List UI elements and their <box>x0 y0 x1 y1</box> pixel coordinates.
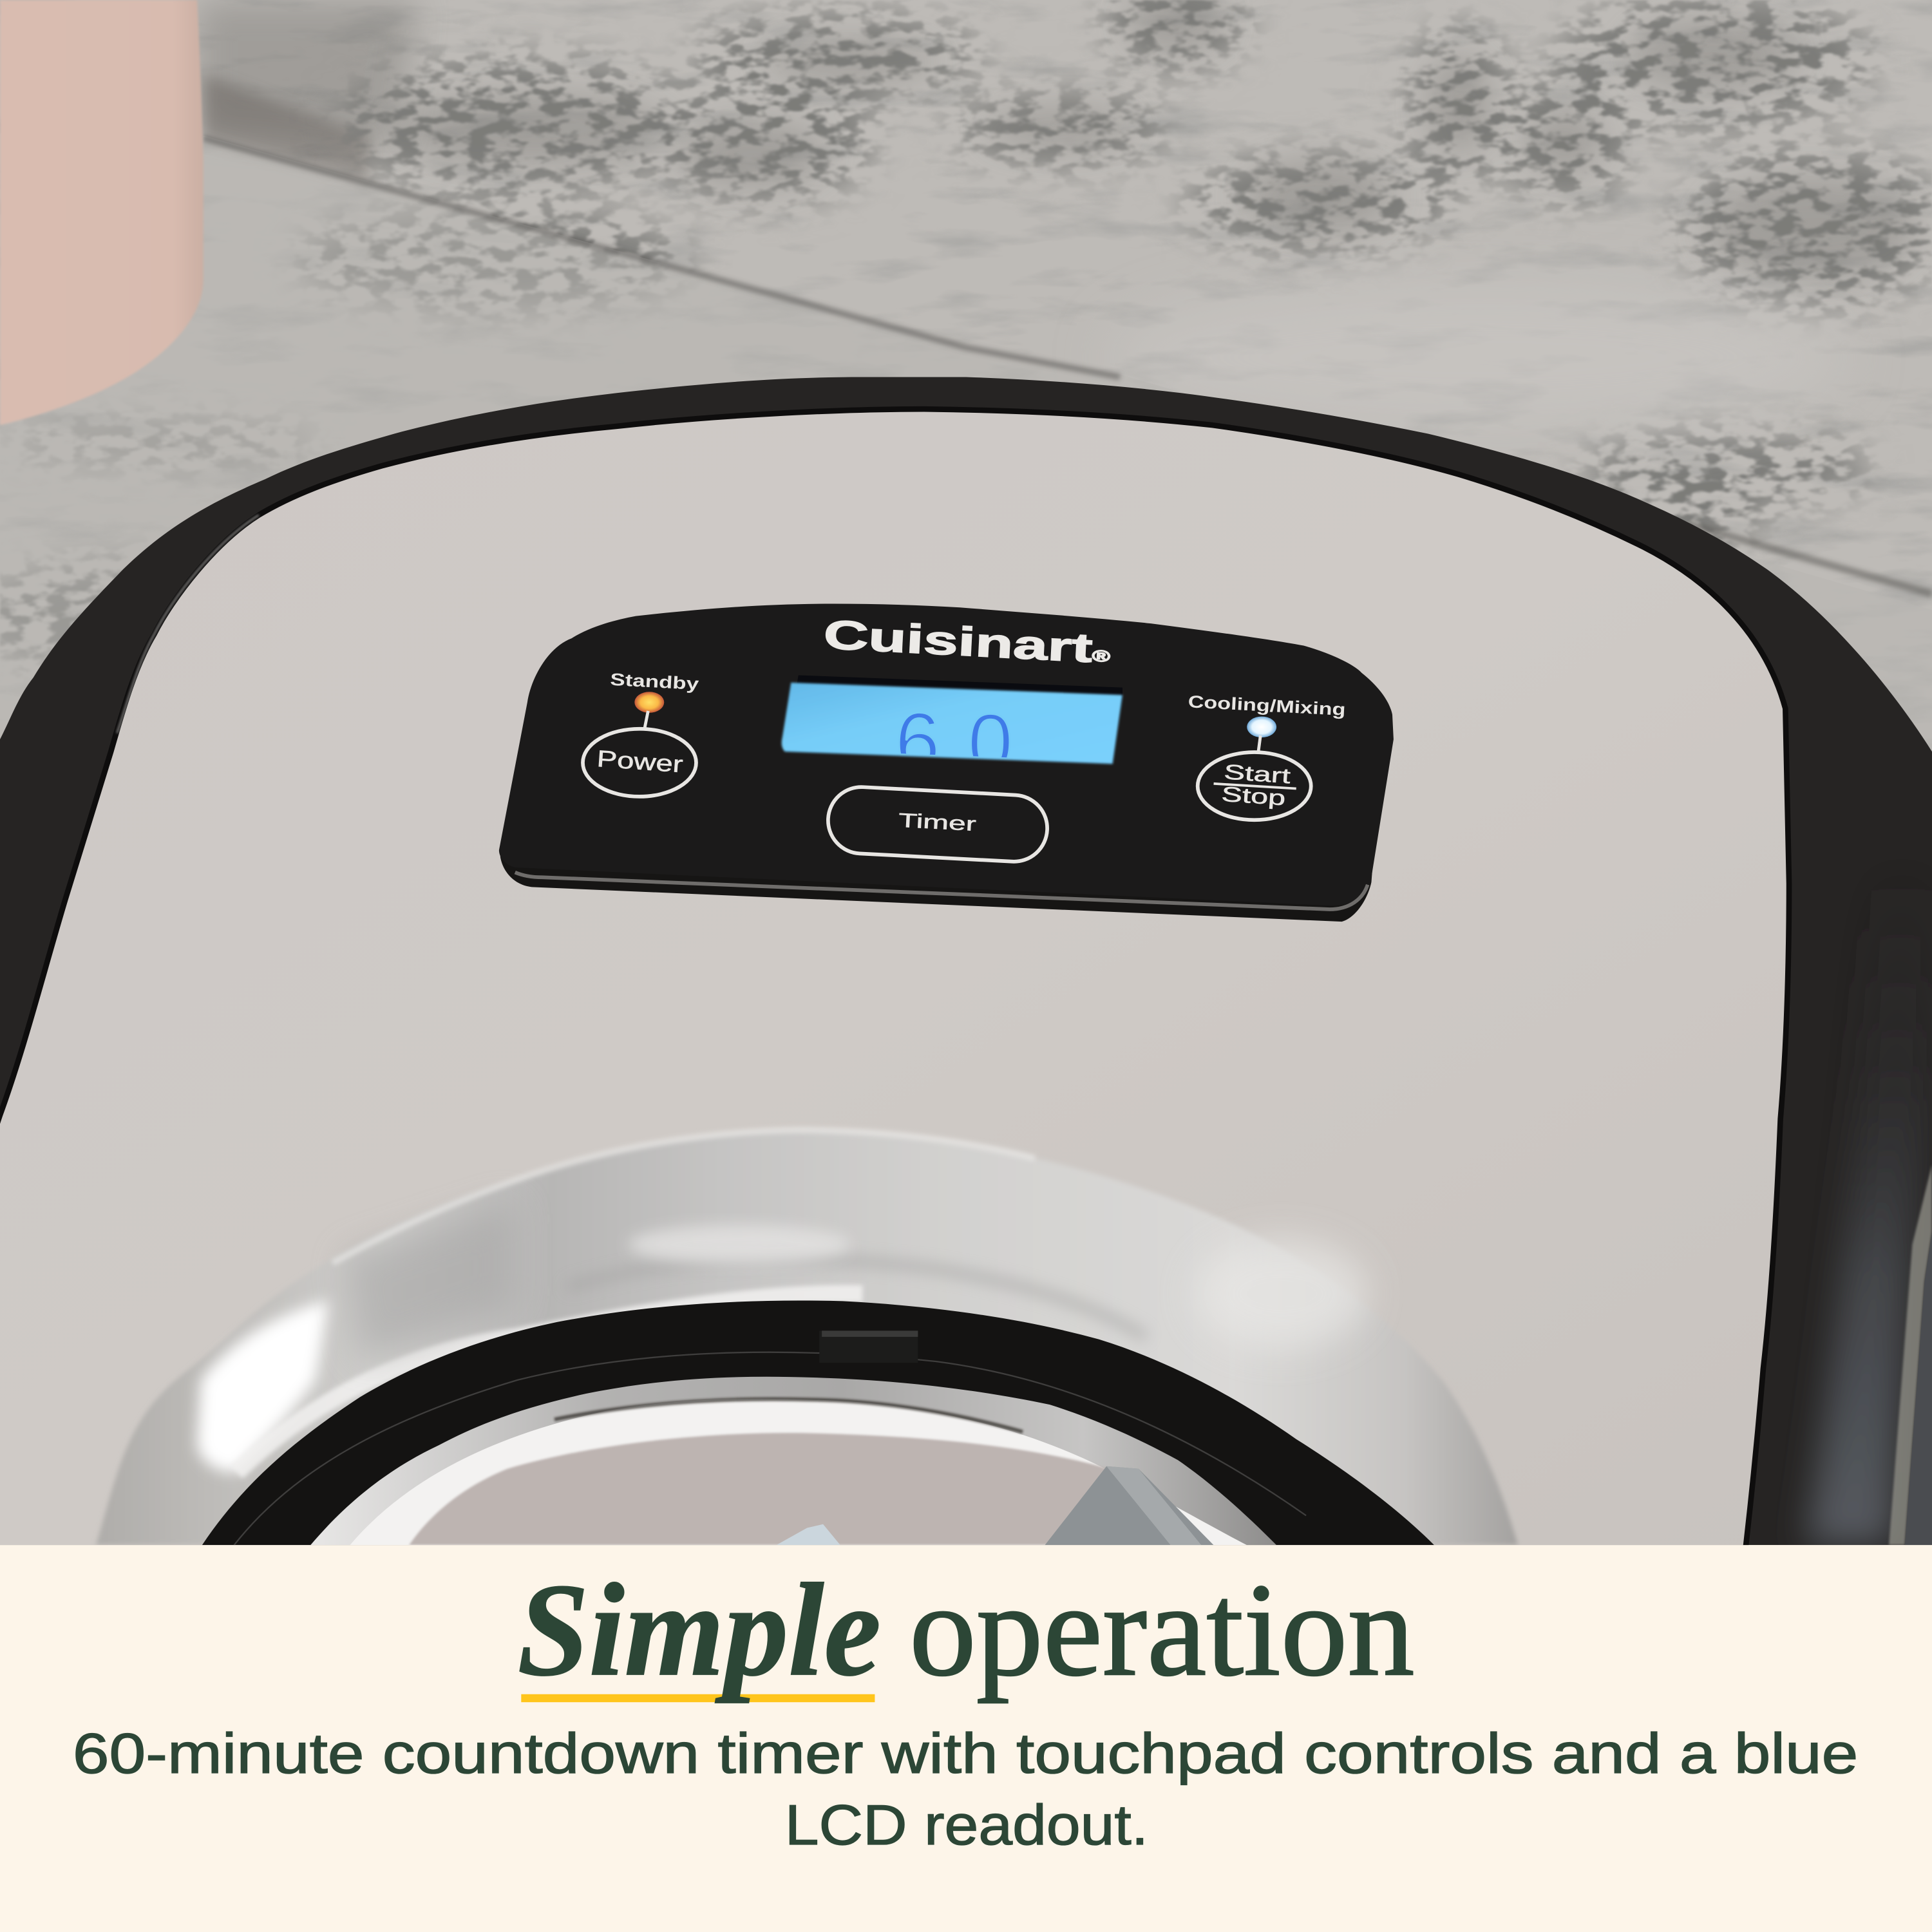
logo: Cuisinart: ® <box>1092 647 1110 666</box>
appliance body <box>0 377 1932 1577</box>
stainless steel top plate <box>0 409 1789 1577</box>
heading: Simple operation: Simple <box>518 1556 881 1703</box>
button: Power: Power <box>596 745 684 777</box>
gray dasher paddle <box>1045 1466 1214 1545</box>
button: Start / Stop: Start <box>1223 760 1291 788</box>
heading: Simple operation <box>518 1556 1414 1703</box>
white inner band <box>350 1399 1247 1545</box>
heading underline <box>521 1694 875 1702</box>
label: Cooling/Mixing: Cooling/Mixing <box>1188 692 1346 719</box>
dark side wall sheen <box>1794 1070 1929 1546</box>
background: distressed wall <box>0 0 1932 752</box>
button: Timer <box>826 785 1049 863</box>
dasher tip <box>776 1524 840 1545</box>
side trim stripe <box>1889 1164 1932 1545</box>
label: Standby: Standby <box>610 670 699 694</box>
metal bowl rim <box>310 1377 1276 1545</box>
button: Timer: Timer <box>898 810 977 835</box>
pink vase <box>0 0 204 425</box>
button: Start / Stop <box>1198 752 1311 820</box>
recessed dome <box>96 1130 1518 1545</box>
button: Start / Stop: Stop <box>1221 782 1286 810</box>
black gasket ring <box>202 1300 1434 1545</box>
logo: Cuisinart: Cuisinart <box>822 612 1001 667</box>
caption panel <box>0 1545 1932 1932</box>
body text: 60-minute countdown timer with touchpad controls and a blue <box>73 1721 1858 1785</box>
timer digits: 60 <box>895 696 1014 788</box>
dome shine <box>197 1300 329 1472</box>
button: Power <box>583 729 696 797</box>
body text: LCD readout. <box>785 1793 1148 1857</box>
bowl interior <box>409 1433 1121 1545</box>
panel face <box>499 604 1394 905</box>
body text <box>73 1721 1858 1857</box>
indicator: standby LED <box>634 692 664 713</box>
panel edge <box>500 826 1374 922</box>
background: counter top <box>0 134 1932 663</box>
control panel <box>499 604 1394 922</box>
LCD screen <box>782 675 1122 788</box>
black outer rim <box>0 377 1932 1545</box>
heading: Simple operation: operation <box>909 1556 1414 1703</box>
indicator: cooling LED <box>1247 717 1276 737</box>
